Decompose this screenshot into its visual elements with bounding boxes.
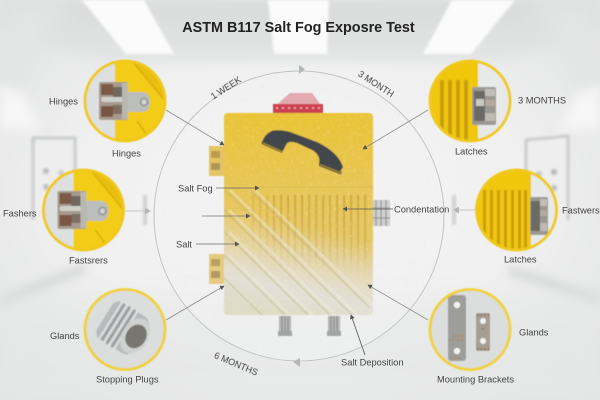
thumbnail: hinge, top left [82,58,168,144]
label: Hinges below: Hinges [112,148,141,158]
label: Salt: Salt [176,240,192,250]
label: Fashers: Fashers [3,208,37,218]
title: ASTM B117 Salt Fog Exposre Test [182,20,415,36]
label: Glands right: Glands [519,328,549,338]
thumbnail: hinge, middle left [41,168,126,252]
label: Glands left: Glands [50,331,80,341]
label: Stopping Plugs: Stopping Plugs [96,374,159,384]
callout lines with arrows [125,110,476,355]
thumbnail: latch, middle right [472,165,558,255]
right cable gland [327,316,341,336]
label: 3 month: 3 MONTH [356,69,396,99]
icon: red beacon [273,93,323,113]
label: 6 months: 6 MONTHS [213,350,259,378]
label: 1 week: 1 WEEK [209,75,243,101]
enclosure: yellow telephone box [209,93,390,336]
arrow: top of cycle [299,65,305,74]
label: Condentation: Condentation [394,204,449,214]
thumbnail: stopping plug [85,290,165,370]
left lower hinge [209,254,224,284]
label: Fastwers: Fastwers [562,206,600,216]
label: Fastsrers: Fastsrers [69,256,108,266]
arrow: bottom of cycle [293,358,300,367]
label: Hinges left: Hinges [49,96,78,106]
thumbnail: mounting brackets [429,288,511,370]
icon: telephone handset [262,130,343,174]
thumbnail: latch, top right [425,56,511,146]
right latch [373,200,390,226]
label: Salt Deposition: Salt Deposition [341,358,404,368]
label: Salt Fog: Salt Fog [178,184,213,194]
label: 3 MONTHS: 3 MONTHS [518,96,566,106]
label: Latches lower: Latches [504,254,537,264]
box body [224,113,373,315]
left cable gland [278,316,292,336]
left upper hinge [209,146,224,176]
label: Latches top: Latches [455,146,488,156]
label: Mounting Brackets: Mounting Brackets [437,374,514,384]
salt fog chamber circle [154,65,444,367]
